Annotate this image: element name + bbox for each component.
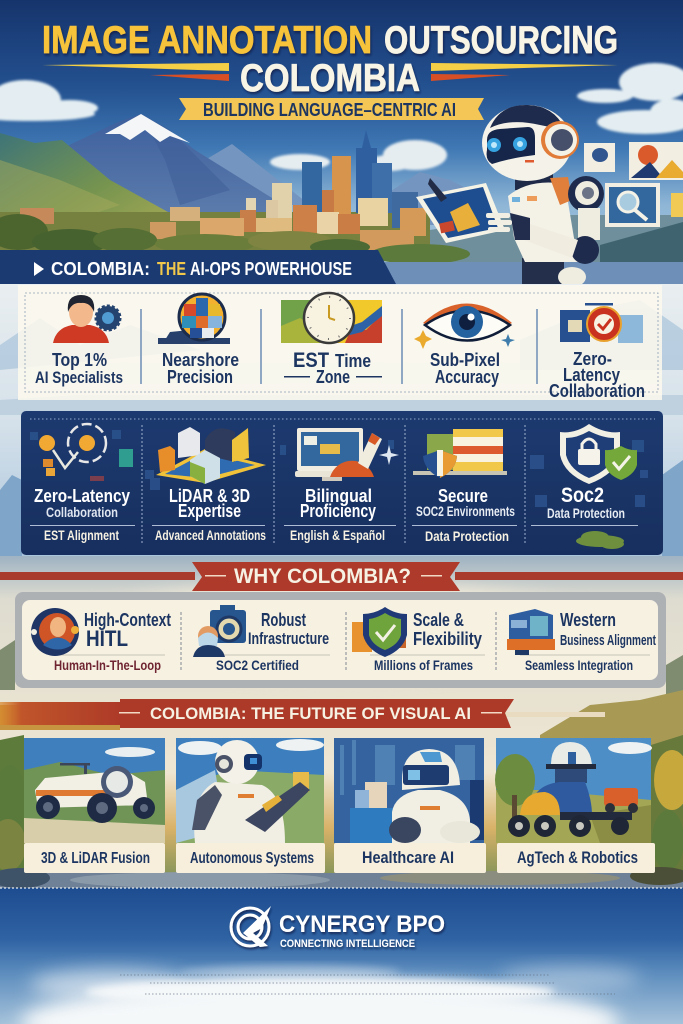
icon: chat card [584, 143, 615, 172]
text: zero-latency collaboration: Latency [563, 365, 620, 385]
icon: eye [414, 304, 515, 349]
icon: specialist person with gear [53, 295, 120, 343]
icon: image card [629, 142, 683, 180]
card: autonomous systems [176, 738, 325, 873]
card: healthcare ai [334, 738, 486, 873]
icon: snow capped volcano [65, 114, 280, 225]
text: lidar expertise [152, 486, 266, 543]
text: scale flexibility: Scale & [413, 610, 464, 630]
icon: city cloud [270, 140, 447, 171]
icon: zero-latency network [39, 424, 133, 481]
icon: robot legs [522, 258, 586, 287]
icon: collaboration badge [560, 303, 643, 343]
text: bilingual proficiency: English & Español [290, 527, 385, 543]
logo: cynergy bpo: CONNECTING INTELLIGENCE [280, 938, 415, 950]
title [42, 19, 618, 100]
panel: capabilities [21, 411, 663, 555]
icon: nearshore globe grid [158, 294, 230, 344]
title flag rules [42, 63, 618, 81]
card: 3d and lidar fusion [24, 738, 165, 873]
text: bilingual proficiency: Bilingual [305, 486, 372, 506]
icon: right cloud [577, 63, 683, 134]
hero illustration [0, 0, 683, 285]
text: secure soc2 environments: Data Protection [425, 528, 509, 544]
icon: green mountain [0, 133, 168, 240]
label: 3D & LiDAR Fusion [41, 850, 150, 867]
text: western business alignment: Seamless Integration [525, 657, 633, 673]
heading: why colombia [0, 562, 683, 591]
text: soc2 data protection: Soc2 [561, 484, 604, 507]
text: bilingual proficiency [284, 486, 396, 543]
label [334, 843, 486, 873]
text: western business alignment: Western [560, 610, 616, 630]
heading: future of visual ai [0, 699, 605, 728]
text: sub-pixel accuracy: Accuracy [435, 367, 499, 387]
icon: human in the loop [31, 608, 79, 656]
image: healthcare robot [334, 738, 484, 843]
heading: why colombia: WHY COLOMBIA? [234, 565, 411, 588]
text: nearshore precision [162, 350, 239, 387]
text: soc2 data protection: Data Protection [547, 505, 625, 521]
icon: soc2 shield [560, 424, 637, 484]
text: high-context hitl: High-Context [84, 610, 171, 630]
logo: cynergy bpo [231, 906, 445, 950]
text: robust infrastructure: SOC2 Certified [216, 657, 299, 673]
text: robust infrastructure: Infrastructure [248, 629, 329, 648]
text: zero-latency: Collaboration [46, 504, 118, 520]
label: AgTech & Robotics [517, 848, 638, 867]
text: top 1%: AI Specialists [35, 368, 123, 387]
text: nearshore precision: Precision [167, 367, 233, 387]
text: soc2 data protection [531, 484, 638, 526]
text: scale flexibility [374, 610, 482, 673]
text: bilingual proficiency: Proficiency [300, 501, 376, 521]
icon: city ground [0, 212, 430, 252]
card: agtech and robotics [495, 738, 655, 873]
text: lidar expertise: Advanced Annotations [155, 527, 266, 543]
panel: key strengths [18, 285, 662, 401]
label: Autonomous Systems [190, 850, 314, 867]
icon: robust infrastructure [193, 605, 246, 657]
text: est time zone [284, 349, 382, 387]
text: western business alignment [525, 610, 656, 673]
text: zero-latency [30, 486, 135, 543]
text: top 1%: Top 1% [52, 350, 107, 370]
icon: distant mountains [205, 144, 480, 225]
icon: lidar 3d scene [156, 427, 266, 484]
icon: clock over colombian flag [281, 293, 382, 343]
text: secure soc2 environments: SOC2 Environments [416, 503, 515, 519]
section banner: THE [157, 259, 186, 279]
text: high-context hitl: Human-In-The-Loop [54, 657, 161, 673]
middle landscape background [0, 556, 683, 888]
icon: right hillside [430, 215, 683, 265]
icon: robot helmet [482, 105, 579, 181]
section banner: AI-OPS POWERHOUSE [190, 259, 352, 279]
footer [0, 888, 683, 1024]
text: secure soc2 environments: Secure [438, 486, 488, 506]
title: OUTSOURCING [384, 19, 618, 62]
text: zero-latency: EST Alignment [44, 527, 119, 543]
icon: magnifier card [605, 183, 660, 227]
text: high-context hitl [54, 610, 171, 673]
icon: bush [576, 531, 624, 549]
text: top 1% [35, 350, 123, 387]
text: zero-latency collaboration [549, 349, 645, 401]
text: robust infrastructure [216, 610, 329, 673]
icon: robot shoulder [550, 176, 604, 212]
text: zero-latency collaboration: Zero- [573, 349, 612, 369]
subtitle ribbon: BUILDING LANGUAGE–CENTRIC AI [203, 100, 456, 120]
text: zero-latency: Zero-Latency [34, 486, 130, 506]
robot with tablet [416, 105, 604, 287]
icon: map card [671, 193, 683, 217]
text: high-context hitl: HITL [86, 626, 128, 651]
logo: cynergy bpo: CYNERGY BPO [279, 911, 445, 938]
icon: foreground trees [0, 214, 470, 264]
title: COLOMBIA [240, 57, 420, 100]
text: secure soc2 environments [412, 486, 517, 544]
icon: secure environment [413, 429, 507, 478]
icon: scale shield [352, 607, 407, 657]
text: est time zone: Time [335, 351, 371, 371]
icon: tablet [416, 178, 505, 243]
section banner [0, 250, 396, 284]
text: est time zone: Zone [316, 367, 350, 387]
panel: why colombia reasons [15, 592, 666, 688]
icon: stone wall [385, 262, 683, 285]
icon: western building [507, 609, 555, 655]
image: autonomous robot [176, 738, 324, 844]
text: scale flexibility: Millions of Frames [374, 657, 473, 673]
text: nearshore precision: Nearshore [162, 350, 239, 370]
text: zero-latency collaboration: Collaboration [549, 381, 645, 401]
icon: robot torso [508, 182, 578, 262]
image: lidar vehicle [24, 738, 165, 843]
icon: bilingual monitor [295, 428, 399, 481]
text: sub-pixel accuracy: Sub-Pixel [430, 350, 500, 370]
text: scale flexibility: Flexibility [413, 629, 482, 649]
text: lidar expertise: LiDAR & 3D [169, 486, 250, 506]
icon: robot hand [486, 213, 512, 232]
heading: future of visual ai: COLOMBIA: THE FUTURE OF VISUAL AI [150, 704, 471, 723]
text: robust infrastructure: Robust [261, 610, 306, 630]
icon: robot arm [510, 208, 600, 264]
image: agricultural robot [495, 738, 652, 843]
section banner: COLOMBIA: [51, 259, 150, 279]
icon: robot neck [515, 172, 553, 190]
text: est time zone: EST [293, 349, 329, 372]
icon: city skyline [20, 130, 426, 250]
text: lidar expertise: Expertise [178, 501, 241, 521]
title: IMAGE ANNOTATION [42, 19, 372, 62]
text: sub-pixel accuracy [430, 350, 500, 387]
label [176, 843, 325, 873]
misty mountain background [0, 284, 683, 560]
label [24, 843, 165, 873]
label [497, 843, 655, 873]
icon: left cloud [0, 80, 98, 121]
label: Healthcare AI [362, 848, 454, 867]
